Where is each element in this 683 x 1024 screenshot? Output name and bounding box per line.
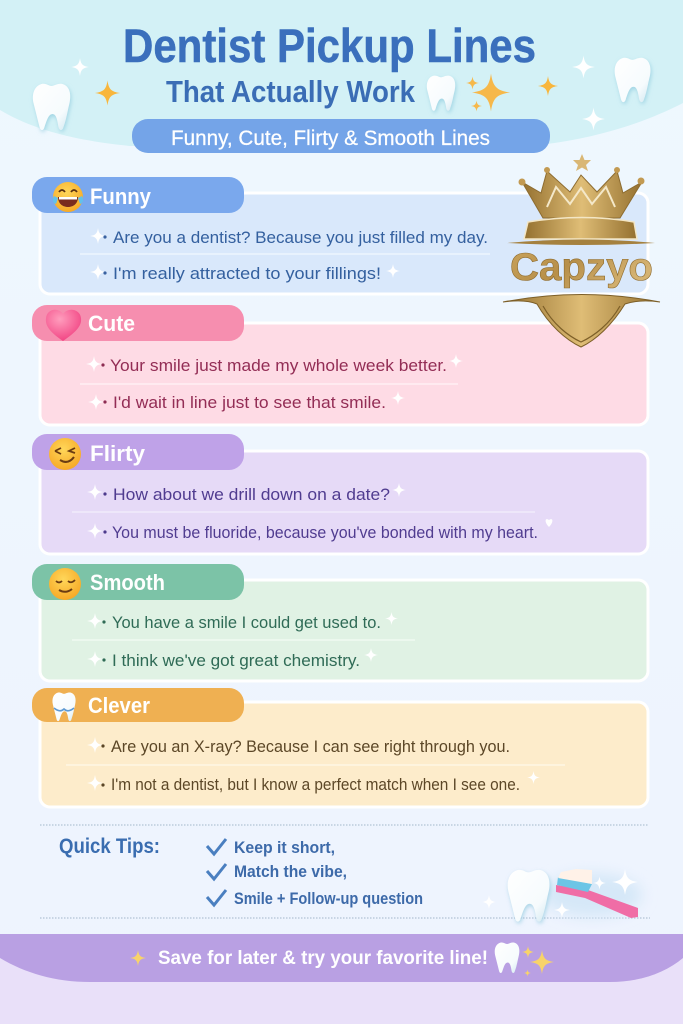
header background wave xyxy=(0,0,683,146)
crown band xyxy=(524,218,637,239)
icon: subtitle sparkles xyxy=(466,74,510,112)
funny line 2: I'm really attracted to your fillings! xyxy=(113,264,381,283)
icon: header sparkles xyxy=(71,56,605,130)
footer banner: Save for later & try your favorite line! xyxy=(158,947,488,969)
icon: laughing emoji xyxy=(53,182,83,212)
panel: flirty xyxy=(32,434,648,554)
divider: top dotted xyxy=(40,824,648,826)
footer banner xyxy=(0,934,683,982)
panel: flirty: Flirty xyxy=(90,441,146,466)
cute line 1: Your smile just made my whole week better. xyxy=(110,356,447,375)
clever heading pill xyxy=(32,688,244,722)
quick tips list xyxy=(207,838,423,908)
logo: Capzyo crown badge xyxy=(503,154,660,347)
icon: heart xyxy=(46,310,81,341)
illustration: tooth and toothbrush xyxy=(482,869,642,922)
icon: left tooth xyxy=(33,84,70,130)
flirty line 1: How about we drill down on a date? xyxy=(113,485,390,504)
panel: clever xyxy=(32,688,648,807)
subtitle pill: Funny, Cute, Flirty & Smooth Lines xyxy=(171,127,490,150)
icon: tooth with braces xyxy=(52,692,76,721)
panel: funny xyxy=(32,177,648,294)
subtitle: That Actually Work xyxy=(166,74,416,109)
cute line 2: I'd wait in line just to see that smile. xyxy=(113,393,386,412)
flirty heading pill xyxy=(32,434,244,470)
shield xyxy=(503,294,660,347)
footer background xyxy=(0,955,683,1024)
tip 3: Smile + Follow-up question xyxy=(234,889,423,908)
panel: smooth xyxy=(32,564,648,681)
icon: subtitle tooth xyxy=(427,76,455,111)
quick tips heading: Quick Tips: xyxy=(59,835,160,858)
icon: footer sparkles xyxy=(522,946,554,976)
flirty line 2: You must be fluoride, because you've bonded with my heart. xyxy=(112,523,538,542)
icon: footer star xyxy=(130,950,146,966)
title: Dentist Pickup Lines xyxy=(123,19,536,72)
icon: footer tooth xyxy=(495,943,519,973)
cute heading pill xyxy=(32,305,244,341)
funny line 1: Are you a dentist? Because you just filled my day. xyxy=(113,228,488,247)
toothbrush xyxy=(556,885,638,918)
icon: right tooth xyxy=(615,58,650,102)
icon: smirking emoji xyxy=(49,438,81,470)
smooth heading pill xyxy=(32,564,244,600)
tip 1: Keep it short, xyxy=(234,838,335,857)
divider: bottom dotted xyxy=(40,917,650,919)
subtitle pill xyxy=(132,119,550,153)
panel: cute: Cute xyxy=(88,311,135,336)
tip 2: Match the vibe, xyxy=(234,862,347,881)
panel: clever: Clever xyxy=(88,693,150,718)
wordmark: Capzyo xyxy=(510,246,653,289)
smooth line 2: I think we've got great chemistry. xyxy=(112,651,360,670)
smooth line 1: You have a smile I could get used to. xyxy=(112,613,381,632)
funny heading pill xyxy=(32,177,244,213)
panel: funny: Funny xyxy=(90,184,152,209)
icon: relaxed emoji xyxy=(49,568,81,600)
panel: cute xyxy=(32,305,648,425)
clever line 1: Are you an X-ray? Because I can see right through you. xyxy=(111,737,510,756)
crown xyxy=(522,171,642,218)
clever line 2: I'm not a dentist, but I know a perfect match when I see one. xyxy=(111,775,520,794)
panel: smooth: Smooth xyxy=(90,570,165,595)
star xyxy=(573,154,591,171)
